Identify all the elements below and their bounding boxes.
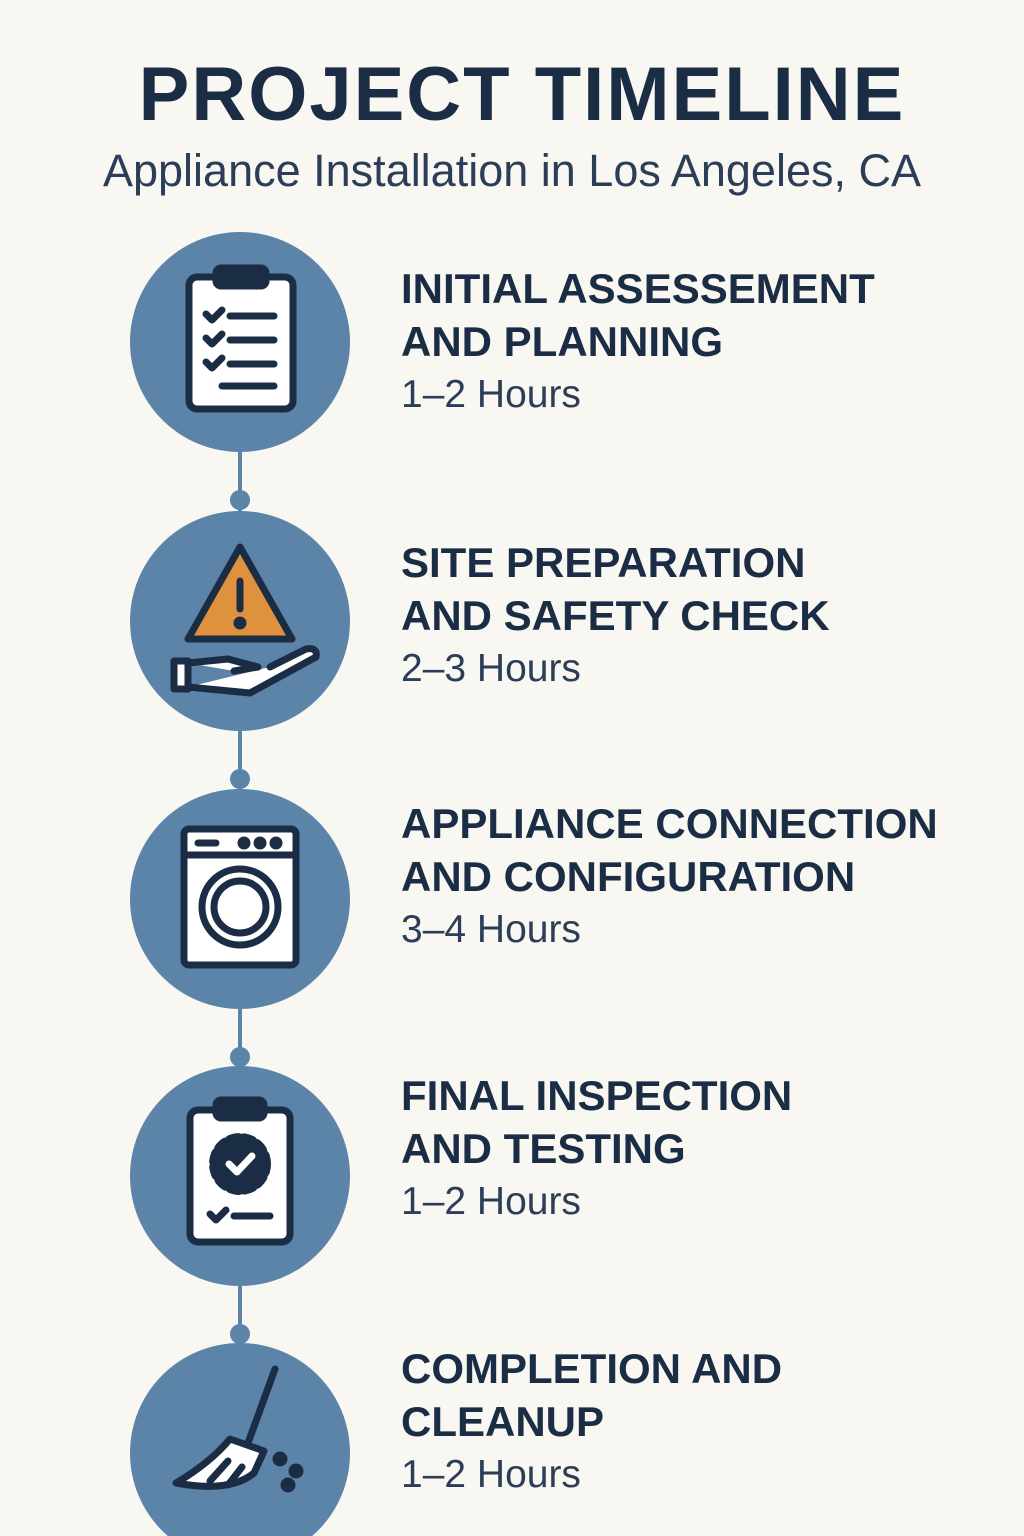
title: PROJECT TIMELINE — [139, 52, 905, 137]
icon: clipboard gear — [130, 1066, 350, 1286]
icon: warning hand — [130, 511, 350, 731]
step 5 text: CLEANUP — [401, 1398, 604, 1445]
step 5 text — [401, 1345, 782, 1496]
icon: clipboard checklist — [130, 232, 350, 452]
step 3 text: AND CONFIGURATION — [401, 853, 855, 900]
step 2 text: 2–3 Hours — [401, 647, 581, 690]
step 2 text — [401, 539, 830, 690]
step 4 text — [401, 1072, 792, 1223]
step 4 text: FINAL INSPECTION — [401, 1072, 792, 1119]
connector dot 3 — [230, 1047, 250, 1067]
step 3 text: 3–4 Hours — [401, 908, 581, 951]
icon: washing machine — [130, 789, 350, 1009]
icon: broom — [130, 1343, 350, 1536]
step 1 text — [401, 265, 875, 416]
connector dot 2 — [230, 769, 250, 789]
step 1 text: INITIAL ASSESSEMENT — [401, 265, 875, 312]
step 3 text — [401, 800, 938, 951]
subtitle: Appliance Installation in Los Angeles, CA — [103, 145, 921, 196]
step 1 text: AND PLANNING — [401, 318, 723, 365]
step 4 text: 1–2 Hours — [401, 1180, 581, 1223]
step 4 text: AND TESTING — [401, 1125, 686, 1172]
step 2 text: AND SAFETY CHECK — [401, 592, 830, 639]
step 2 text: SITE PREPARATION — [401, 539, 805, 586]
connector line — [238, 440, 242, 1420]
connector dot 1 — [230, 490, 250, 510]
step 5 text: 1–2 Hours — [401, 1453, 581, 1496]
connector dot 4 — [230, 1324, 250, 1344]
step 5 text: COMPLETION AND — [401, 1345, 782, 1392]
step 1 text: 1–2 Hours — [401, 373, 581, 416]
step 3 text: APPLIANCE CONNECTION — [401, 800, 938, 847]
